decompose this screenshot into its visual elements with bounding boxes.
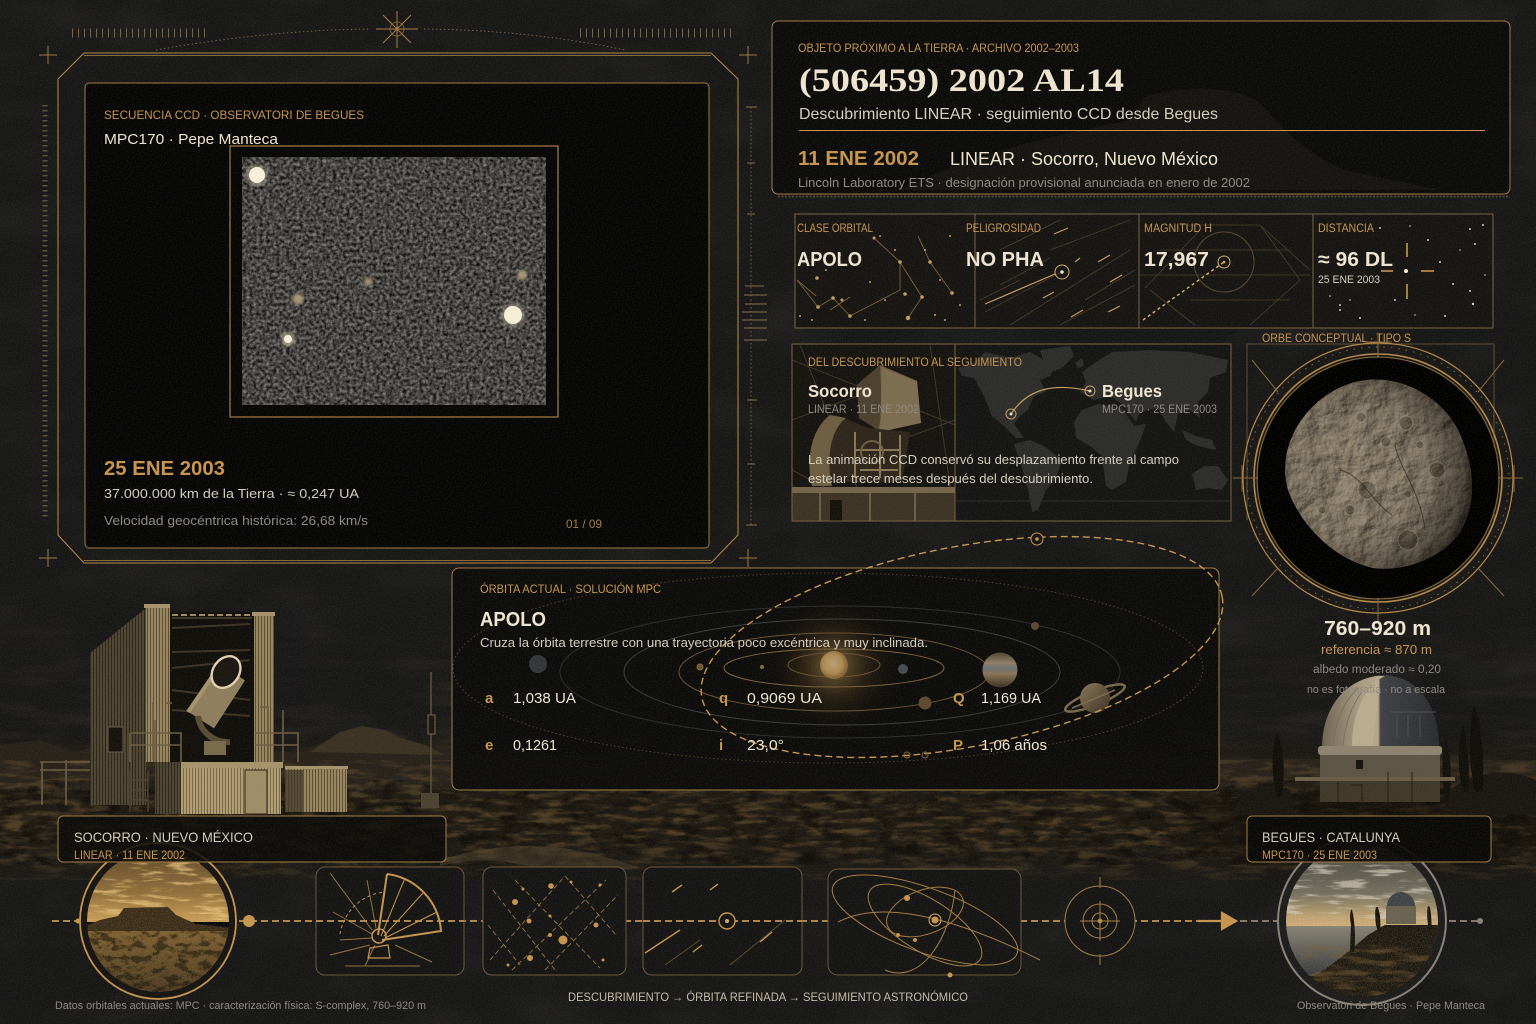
orbital elements: a bbox=[485, 690, 494, 707]
dashed axis bbox=[52, 920, 1205, 922]
text: date and distance: Velocidad geocéntrica histórica: 26,68 km/s bbox=[104, 513, 369, 528]
text: Begues bbox=[1102, 381, 1217, 416]
label: Socorro site: LINEAR · 11 ENE 2002 bbox=[74, 848, 185, 862]
text: heading bbox=[480, 581, 928, 650]
lower building bbox=[1295, 777, 1455, 781]
box: telescope fan bbox=[316, 867, 464, 975]
orbital elements: 23,0° bbox=[747, 737, 784, 754]
telescope tube bbox=[201, 672, 232, 720]
card: hazard: NO PHA bbox=[966, 249, 1044, 271]
panel: discovery to follow-up bbox=[792, 344, 1231, 521]
label: Socorro site bbox=[58, 816, 446, 862]
text: heading: DEL DESCUBRIMIENTO AL SEGUIMIENTO bbox=[808, 355, 1022, 369]
top ornament bbox=[72, 11, 735, 50]
text: note: La animación CCD conservó su desplazamiento frente al campo bbox=[808, 453, 1179, 467]
card: distance bbox=[1313, 214, 1493, 328]
text: heading: APOLO bbox=[480, 609, 546, 631]
text: CCD heading bbox=[104, 108, 364, 148]
orbital elements: P bbox=[953, 737, 963, 754]
end nodes bbox=[76, 918, 1483, 924]
text: heading: Cruza la órbita terrestre con una trayectoria poco excéntrica y muy inclinada. bbox=[480, 635, 928, 650]
right pillar bbox=[254, 614, 274, 762]
label: Begues site: BEGUES · CATALUNYA bbox=[1262, 829, 1401, 845]
world map bbox=[955, 344, 1231, 521]
engraving: Socorro telescope bbox=[792, 344, 955, 521]
text: CCD heading: MPC170 · Pepe Manteca bbox=[104, 131, 279, 148]
orb label: ORBE CONCEPTUAL · TIPO S bbox=[1262, 331, 1411, 345]
eyebrow: OBJETO PRÓXIMO A LA TIERRA · ARCHIVO 2002–2003 bbox=[798, 40, 1079, 55]
reference text: referencia ≈ 870 m bbox=[1321, 642, 1432, 657]
railings bbox=[40, 703, 298, 805]
corner crosses bbox=[39, 46, 757, 567]
footer: credit: Observatori de Begues · Pepe Manteca bbox=[1297, 1000, 1486, 1012]
albedo note: albedo moderado ≈ 0,20 bbox=[1313, 664, 1441, 676]
text: Socorro: LINEAR · 11 ENE 2002 bbox=[808, 404, 919, 416]
orbital elements: i bbox=[719, 737, 723, 754]
text: date and distance: 37.000.000 km de la Tierra · ≈ 0,247 UA bbox=[104, 486, 359, 501]
faint mesa bbox=[900, 89, 1440, 190]
box: orbit solution bbox=[822, 856, 1040, 984]
card: distance: ≈ 96 DL bbox=[1318, 249, 1393, 271]
observatory: Begues bbox=[1180, 675, 1536, 867]
craters bbox=[1318, 412, 1445, 550]
text: Begues: MPC170 · 25 ENE 2003 bbox=[1102, 404, 1217, 416]
trees and hillside bbox=[1180, 783, 1536, 867]
text: date and distance: 25 ENE 2003 bbox=[104, 458, 225, 480]
dome bbox=[1322, 675, 1439, 748]
panel: conceptual orb bbox=[1233, 331, 1523, 696]
orbital elements: 1,06 años bbox=[981, 737, 1047, 754]
discovery place: LINEAR · Socorro, Nuevo México bbox=[950, 149, 1218, 169]
frame counter: 01 / 09 bbox=[566, 517, 602, 531]
label: Begues site: MPC170 · 25 ENE 2003 bbox=[1262, 848, 1377, 862]
landscape backdrop bbox=[0, 691, 1536, 880]
card: hazard bbox=[966, 214, 1139, 328]
text: CCD heading: SECUENCIA CCD · OBSERVATORI DE BEGUES bbox=[104, 108, 364, 122]
subtitle: Descubrimiento LINEAR · seguimiento CCD desde Begues bbox=[799, 106, 1218, 123]
box: moving target bbox=[643, 867, 802, 975]
card: distance: DISTANCIA bbox=[1318, 223, 1374, 235]
card: hazard: PELIGROSIDAD bbox=[966, 223, 1041, 235]
mast bbox=[430, 672, 432, 800]
telescope building: Socorro bbox=[40, 604, 439, 814]
orbital elements: q bbox=[719, 690, 728, 707]
orbital elements: 0,1261 bbox=[513, 737, 557, 754]
orbital elements: Q bbox=[953, 690, 965, 707]
card: distance: 25 ENE 2003 bbox=[1318, 274, 1380, 286]
text: note bbox=[808, 453, 1179, 486]
side rulers bbox=[45, 105, 767, 525]
albedo note: no es fotografía · no a escala bbox=[1307, 684, 1446, 696]
orbital elements: e bbox=[485, 737, 493, 754]
open bay bbox=[170, 612, 254, 762]
label: Socorro site: SOCORRO · NUEVO MÉXICO bbox=[74, 829, 253, 845]
panel: title block bbox=[772, 21, 1510, 194]
card: orbital class: CLASE ORBITAL bbox=[797, 223, 874, 235]
stars in CCD field bbox=[246, 164, 527, 346]
discovery date: 11 ENE 2002 bbox=[798, 148, 919, 170]
text: Socorro: Socorro bbox=[808, 381, 872, 401]
orbital elements bbox=[485, 690, 1047, 754]
base bbox=[155, 762, 182, 814]
box: star grid bbox=[483, 867, 626, 975]
orbital elements: 1,038 UA bbox=[513, 690, 576, 707]
CCD image frame bbox=[230, 146, 558, 417]
orbital elements: 0,9069 UA bbox=[747, 690, 822, 707]
footer: sources: Datos orbitales actuales: MPC · caracterización física: S-complex, 760–920 m bbox=[55, 1000, 426, 1012]
card: orbital class: APOLO bbox=[797, 249, 862, 271]
text: heading: ÓRBITA ACTUAL · SOLUCIÓN MPC bbox=[480, 581, 661, 596]
solar system diagram bbox=[453, 573, 1203, 763]
text: Socorro bbox=[808, 381, 919, 416]
left pillar bbox=[146, 606, 170, 762]
drum bbox=[1320, 755, 1440, 777]
orbital elements: 1,169 UA bbox=[981, 690, 1041, 707]
side wall bbox=[90, 608, 146, 805]
title: (506459) 2002 AL14 bbox=[799, 63, 1124, 99]
footer: sequence: DESCUBRIMIENTO → ÓRBITA REFINADA → SEGUIMIENTO ASTRONÓMICO bbox=[568, 989, 968, 1004]
medallion: Socorro landscape bbox=[80, 843, 236, 999]
arrow bbox=[1198, 913, 1236, 929]
target reticle bbox=[1065, 877, 1135, 965]
text: note: estelar trece meses después del descubrimiento. bbox=[808, 472, 1093, 486]
outer octagonal frame bbox=[58, 53, 738, 563]
rings bbox=[1233, 335, 1523, 622]
asteroid bbox=[1285, 379, 1472, 569]
card: H magnitude: 17,967 bbox=[1144, 249, 1209, 271]
albedo note bbox=[1307, 664, 1446, 696]
timeline bbox=[52, 856, 1483, 984]
saturn bbox=[1063, 680, 1127, 716]
text: Begues: Begues bbox=[1102, 381, 1162, 401]
medallion: Begues landscape bbox=[1278, 837, 1446, 1005]
discovery note: Lincoln Laboratory ETS · designación provisional anunciada en enero de 2002 bbox=[798, 176, 1250, 190]
annex bbox=[285, 768, 347, 812]
node bbox=[243, 915, 255, 927]
card: orbital class bbox=[795, 214, 975, 328]
text: date and distance bbox=[104, 458, 369, 528]
card: H magnitude: MAGNITUD H bbox=[1144, 223, 1212, 235]
card: H magnitude bbox=[1139, 214, 1313, 328]
inner panel bbox=[85, 83, 709, 548]
panel: current orbit bbox=[452, 498, 1241, 796]
panel frame: CCD sequence bbox=[39, 46, 757, 567]
asteroid orbit bbox=[683, 498, 1241, 796]
size text: 760–920 m bbox=[1324, 618, 1431, 640]
stat cards bbox=[795, 214, 1493, 328]
label: Begues site bbox=[1247, 816, 1491, 862]
